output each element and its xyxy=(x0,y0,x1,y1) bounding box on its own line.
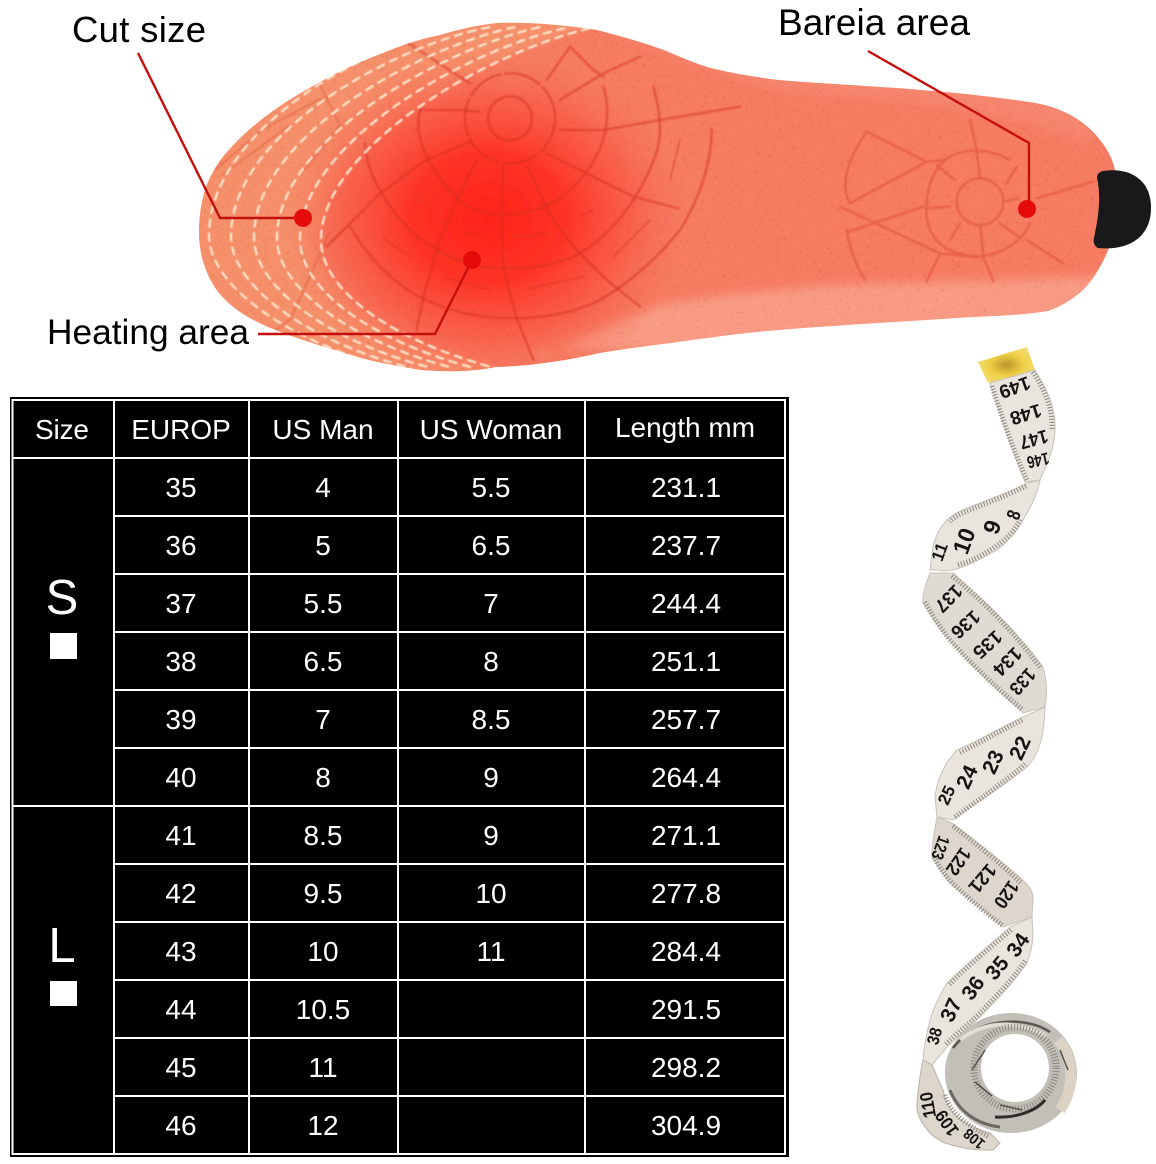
callout: cut size: Cut size xyxy=(72,9,206,50)
tape numbers: 9 xyxy=(978,517,1006,537)
tape numbers: 35 xyxy=(981,952,1014,985)
table header xyxy=(35,412,755,445)
table rows: 298.2 xyxy=(651,1052,721,1083)
table rows: 5.5 xyxy=(472,472,510,503)
tape numbers: 135 xyxy=(968,625,1006,663)
toe web pattern xyxy=(215,85,340,335)
size table xyxy=(10,397,789,1157)
speckle texture xyxy=(202,26,1103,370)
tape numbers: 10 xyxy=(947,525,981,557)
tape numbers: 25 xyxy=(934,782,960,808)
table rows: 251.1 xyxy=(651,646,721,677)
table rows: 11 xyxy=(476,936,506,967)
tape numbers: 147 xyxy=(1017,425,1050,453)
table rows: 7 xyxy=(315,704,331,735)
tape numbers: 23 xyxy=(978,747,1009,778)
table rows: 10 xyxy=(475,878,507,909)
table rows: 9.5 xyxy=(304,878,342,909)
table rows: 271.1 xyxy=(651,820,721,851)
tape ribbon segments xyxy=(923,370,1055,1065)
table rows: 8.5 xyxy=(304,820,342,851)
callout: heating area: Heating area xyxy=(47,313,249,352)
table rows: 5.5 xyxy=(304,588,342,619)
table rows: 237.7 xyxy=(651,530,721,561)
table rows: 10.5 xyxy=(296,994,350,1025)
table rows: 257.7 xyxy=(651,704,721,735)
table rows: 39 xyxy=(165,704,197,735)
table rows: 231.1 xyxy=(651,472,721,503)
table rows: 45 xyxy=(165,1052,197,1083)
tape numbers: 120 xyxy=(990,877,1023,912)
tape numbers: 22 xyxy=(1005,733,1036,764)
table rows: 38 xyxy=(165,646,197,677)
tape numbers: 24 xyxy=(952,761,983,793)
table header: Size xyxy=(35,414,89,445)
table rows: 7 xyxy=(483,588,499,619)
table rows: 35 xyxy=(165,472,197,503)
table rows: 11 xyxy=(308,1052,338,1083)
table rows: 46 xyxy=(165,1110,197,1141)
table rows: 8.5 xyxy=(472,704,510,735)
tape numbers: 123 xyxy=(927,833,952,862)
table rows: 37 xyxy=(165,588,197,619)
table header: US Man xyxy=(272,414,374,445)
forefoot web pattern xyxy=(327,40,740,360)
insole illustration xyxy=(190,5,1151,388)
tape coil xyxy=(945,1013,1077,1133)
heel web pattern xyxy=(840,120,1093,282)
table rows: 304.9 xyxy=(651,1110,721,1141)
table rows: 244.4 xyxy=(651,588,721,619)
size group S: S xyxy=(46,571,78,625)
toe band outside the heating zone xyxy=(199,22,584,371)
callout: heating area xyxy=(47,251,481,352)
table rows: 10 xyxy=(307,936,339,967)
tape numbers: 37 xyxy=(936,995,967,1026)
tape numbers xyxy=(916,371,1051,1152)
table rows: 6.5 xyxy=(472,530,510,561)
table rows: 44 xyxy=(165,994,197,1025)
callout: bareia area xyxy=(778,2,1036,218)
table rows: 9 xyxy=(483,762,499,793)
tape numbers: 122 xyxy=(942,844,975,879)
tape numbers: 148 xyxy=(1007,399,1044,428)
callout: bareia area: Bareia area xyxy=(778,2,970,43)
table rows: 291.5 xyxy=(651,994,721,1025)
table rows: 36 xyxy=(165,530,197,561)
table rows: 264.4 xyxy=(651,762,721,793)
tape numbers: 134 xyxy=(988,642,1026,680)
tape numbers: 137 xyxy=(931,581,967,617)
table rows: 277.8 xyxy=(651,878,721,909)
table rows: 5 xyxy=(315,530,331,561)
table rows: 12 xyxy=(307,1110,339,1141)
table rows xyxy=(165,472,721,1141)
table rows: 42 xyxy=(165,878,197,909)
tape tail xyxy=(917,1060,1000,1150)
tape numbers: 110 xyxy=(916,1090,940,1120)
tape numbers: 133 xyxy=(1005,664,1040,699)
tape numbers: 38 xyxy=(924,1026,946,1047)
table rows: 9 xyxy=(483,820,499,851)
table header: Length mm xyxy=(615,412,755,443)
tape numbers: 121 xyxy=(963,859,1000,897)
callout: cut size xyxy=(72,9,312,227)
lighter rim along the upper edge xyxy=(662,50,1092,140)
cut guide stitching xyxy=(209,26,590,368)
table rows: 8 xyxy=(315,762,331,793)
tape metal tip xyxy=(978,347,1035,383)
table header: US Woman xyxy=(420,414,562,445)
size group L xyxy=(48,919,77,1006)
table rows: 8 xyxy=(483,646,499,677)
table rows: 4 xyxy=(315,472,331,503)
measuring tape xyxy=(916,347,1077,1152)
heating glow xyxy=(302,63,662,371)
tape numbers: 108 xyxy=(961,1124,989,1152)
icon: power plug cap xyxy=(1094,170,1151,248)
table header: EUROP xyxy=(131,414,231,445)
tape numbers: 8 xyxy=(1002,507,1025,523)
tape numbers: 34 xyxy=(1002,929,1035,961)
table rows: 284.4 xyxy=(651,936,721,967)
tape tick marks xyxy=(925,372,1052,1136)
table rows: 43 xyxy=(165,936,197,967)
tape numbers: 109 xyxy=(931,1106,963,1140)
lighter rim along the lower edge xyxy=(538,272,1096,356)
tape numbers: 149 xyxy=(996,371,1033,402)
tape numbers: 146 xyxy=(1025,448,1051,471)
tape numbers: 11 xyxy=(928,540,952,564)
size group L: L xyxy=(48,919,76,973)
table rows: 6.5 xyxy=(304,646,342,677)
tape numbers: 136 xyxy=(946,605,984,642)
table rows: 40 xyxy=(165,762,197,793)
table rows: 41 xyxy=(165,820,197,851)
tape numbers: 36 xyxy=(957,972,990,1004)
size group S xyxy=(46,571,78,659)
